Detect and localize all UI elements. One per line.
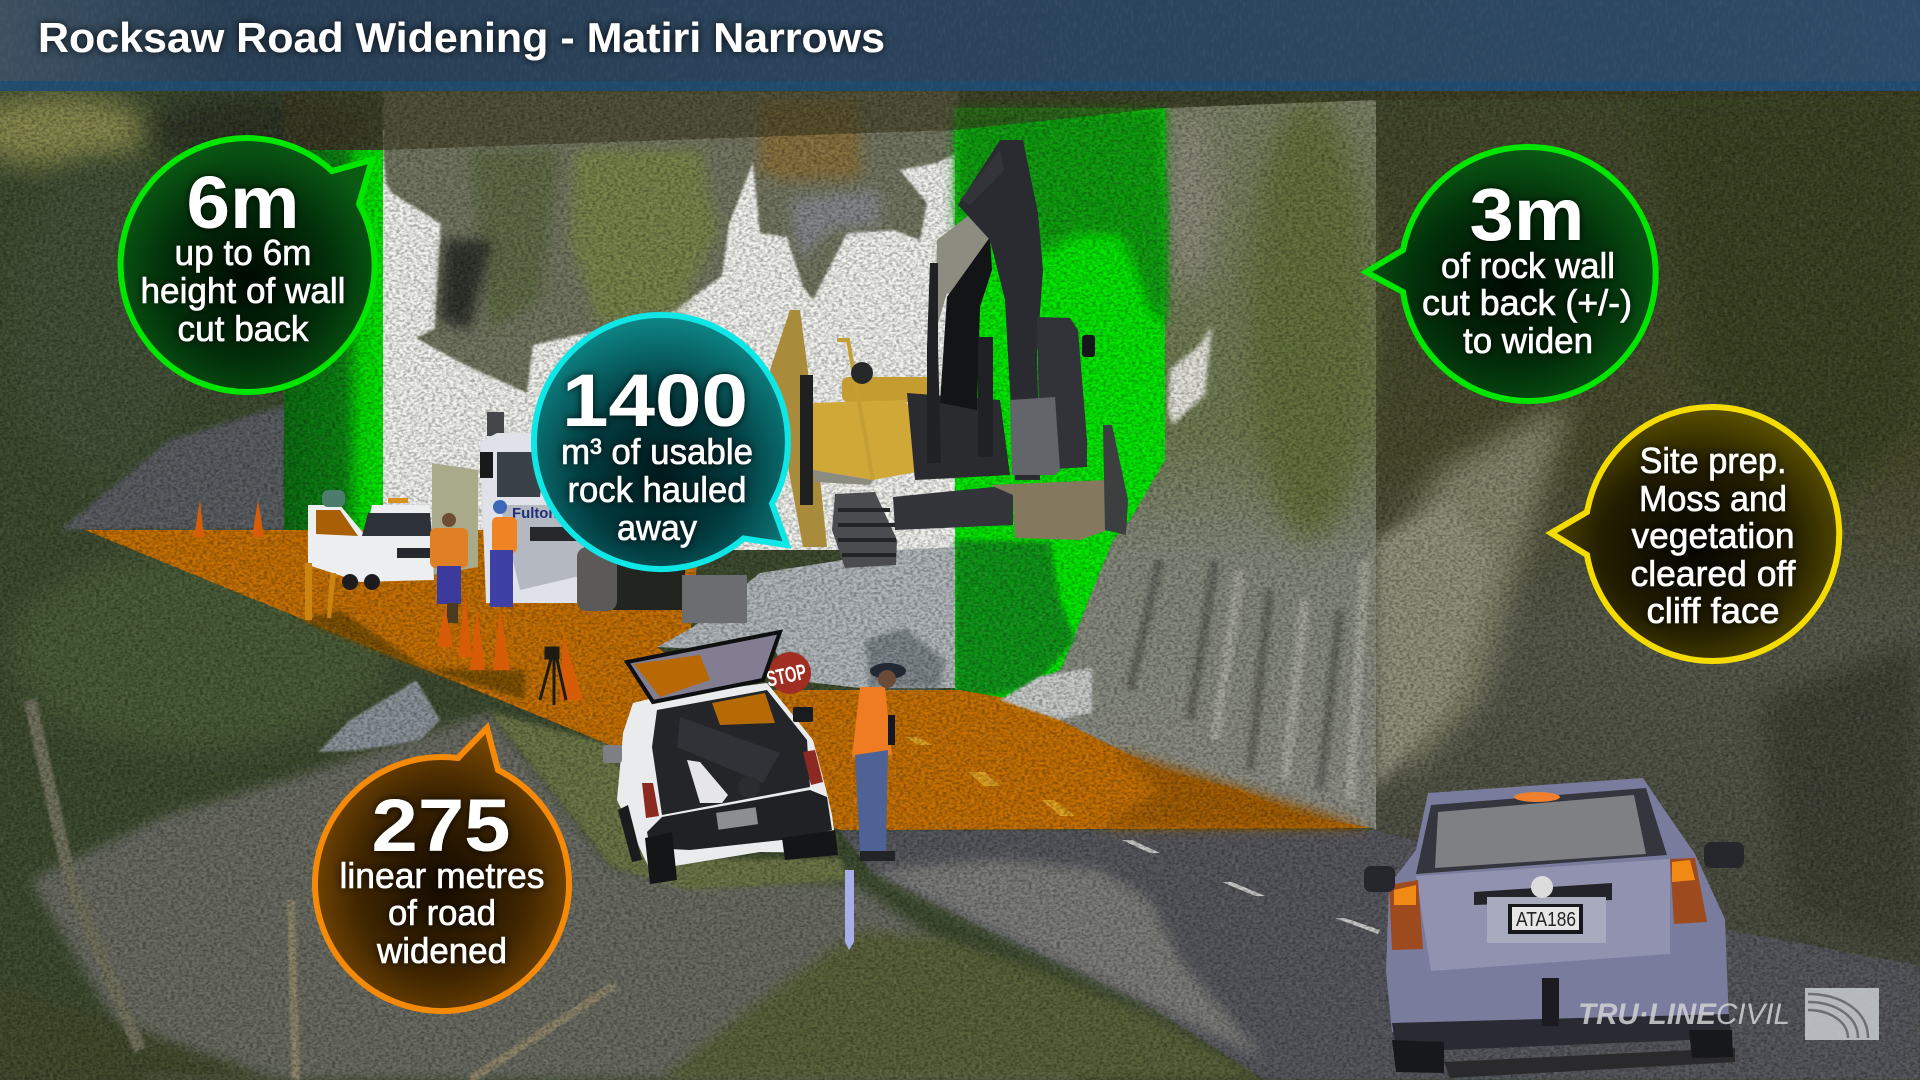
open hatch: [627, 632, 780, 702]
bottom left shrubs: [0, 980, 280, 1080]
road markings: [905, 737, 1075, 816]
3m caption: to widen: [1463, 320, 1593, 361]
tail lights: [642, 750, 823, 818]
boot handle: [1474, 883, 1612, 905]
brake light: [1514, 792, 1560, 802]
lower road: [840, 830, 1920, 1080]
truck cab: Fulton Hogan: [512, 505, 608, 522]
broken stump: [291, 900, 615, 1080]
cab: [1037, 317, 1087, 470]
right cliff: [1376, 91, 1920, 965]
mirrors: [1364, 866, 1395, 892]
lower dark valance: [1392, 1014, 1732, 1050]
machinery and people on site: [194, 140, 1744, 1078]
dump truck body: [432, 463, 478, 575]
blade: [990, 480, 1108, 540]
275 caption: widened: [376, 930, 507, 971]
wheels: [618, 805, 642, 862]
far road: [60, 405, 285, 530]
stop sign: STOP: [764, 659, 809, 692]
roadside grass: [490, 712, 850, 890]
car body: [1386, 778, 1729, 1032]
site prep caption: [1630, 440, 1796, 631]
blade disc: [1103, 425, 1128, 535]
rear tyres: [1392, 1030, 1733, 1073]
1400 caption: away: [617, 507, 697, 548]
logo: Tru-Line Civil: [1578, 988, 1879, 1040]
tow bar: [1542, 978, 1559, 1026]
traffic cones: [194, 500, 583, 700]
bumper: [647, 790, 832, 850]
ute tray interior: [652, 690, 810, 815]
logo mark: [1805, 988, 1879, 1040]
white ute foreground: [603, 632, 838, 884]
1400 caption: m³ of usable: [561, 431, 753, 472]
car shadow: [1444, 1048, 1735, 1078]
truck cab: [480, 412, 608, 603]
white ute left: [308, 490, 434, 590]
tail lights: [1389, 880, 1423, 950]
cliff vegetation and rock: [383, 91, 958, 393]
ute body: [617, 683, 837, 870]
callout: 3m cut back: [1366, 147, 1656, 401]
callout: 275 linear metres: [315, 728, 569, 1011]
boom: [935, 200, 992, 333]
white cut cliff: [383, 130, 958, 550]
lower road markings: [1122, 840, 1380, 934]
road posts: [305, 563, 336, 620]
lower left gravel slope: [30, 712, 1080, 1080]
excavator track: [832, 492, 897, 568]
large dark excavator: [927, 140, 1128, 540]
rock panel: [1005, 100, 1376, 830]
1400 caption: [561, 431, 753, 548]
engine bay and undercarriage: [893, 393, 1013, 530]
hydraulic bracket: [1010, 397, 1060, 475]
wheelie bin: [677, 717, 780, 783]
large tyres and chassis: [577, 547, 747, 623]
marker post: [845, 870, 854, 950]
centre panel dark mottling: [955, 108, 1165, 330]
toyota badge: [1531, 876, 1553, 898]
surveyor tripod: [540, 648, 566, 705]
mirrors: [603, 745, 622, 763]
6m value: 6m: [186, 161, 300, 244]
callout: 6m height: [121, 138, 375, 392]
title: Rocksaw Road Widening - Matiri Narrows: [38, 14, 885, 61]
6m caption: up to 6m: [174, 232, 312, 273]
site prep caption: Site prep.: [1640, 440, 1786, 481]
rock strata streaks: [1130, 560, 1340, 790]
6m caption: cut back: [178, 308, 309, 349]
callout: site prep: [1551, 407, 1839, 661]
logo wordmark: TRU·LINECIVIL: [1578, 998, 1790, 1031]
left trees: [0, 94, 390, 750]
275 caption: linear metres: [340, 855, 544, 896]
surveyor in orange: [852, 663, 906, 861]
broken boulders: [318, 680, 440, 752]
boom cylinders: [927, 263, 993, 463]
car: [1364, 778, 1744, 1078]
plate recess: [1487, 897, 1606, 943]
6m caption: [140, 232, 346, 349]
site prep caption: cleared off: [1630, 553, 1796, 594]
site prep caption: vegetation: [1632, 515, 1794, 556]
6m caption: height of wall: [140, 270, 346, 311]
275 caption: of road: [388, 892, 496, 933]
bottom grass verge: [660, 930, 1265, 1080]
GO sign: [322, 490, 345, 507]
right cliff tan faces: [1376, 500, 1493, 790]
car number plate: ATA186: [1516, 909, 1576, 931]
orange road overlay: [85, 530, 1372, 830]
yellow excavator body: [813, 340, 932, 485]
dim top band: [284, 91, 1920, 150]
1400 value: 1400: [562, 359, 748, 442]
275 caption: [340, 855, 544, 971]
275 value: 275: [372, 784, 510, 867]
site prep caption: cliff face: [1646, 590, 1780, 631]
3m caption: of rock wall: [1441, 245, 1615, 286]
workers: [430, 500, 517, 623]
stop sign: [764, 652, 811, 694]
centre green panel: [955, 108, 1165, 700]
white streak on rock: [1168, 325, 1212, 425]
white bag: [687, 760, 728, 803]
1400 caption: rock hauled: [568, 469, 746, 510]
callout: 1400 cubic metres: [534, 315, 788, 569]
3m caption: [1422, 245, 1632, 361]
header bar: [0, 0, 1920, 91]
3m caption: cut back (+/-): [1422, 282, 1632, 323]
yellow excavator arm: [770, 310, 827, 547]
left green panel: [284, 150, 383, 530]
pale rocks at base of cliff: [1000, 668, 1092, 720]
3m value: 3m: [1470, 173, 1584, 256]
arm: [958, 140, 1043, 480]
tree trunk: [30, 700, 140, 1050]
road gravel shoulder: [870, 860, 1265, 1060]
site prep caption: Moss and: [1639, 478, 1787, 519]
rock pile: [657, 547, 955, 688]
